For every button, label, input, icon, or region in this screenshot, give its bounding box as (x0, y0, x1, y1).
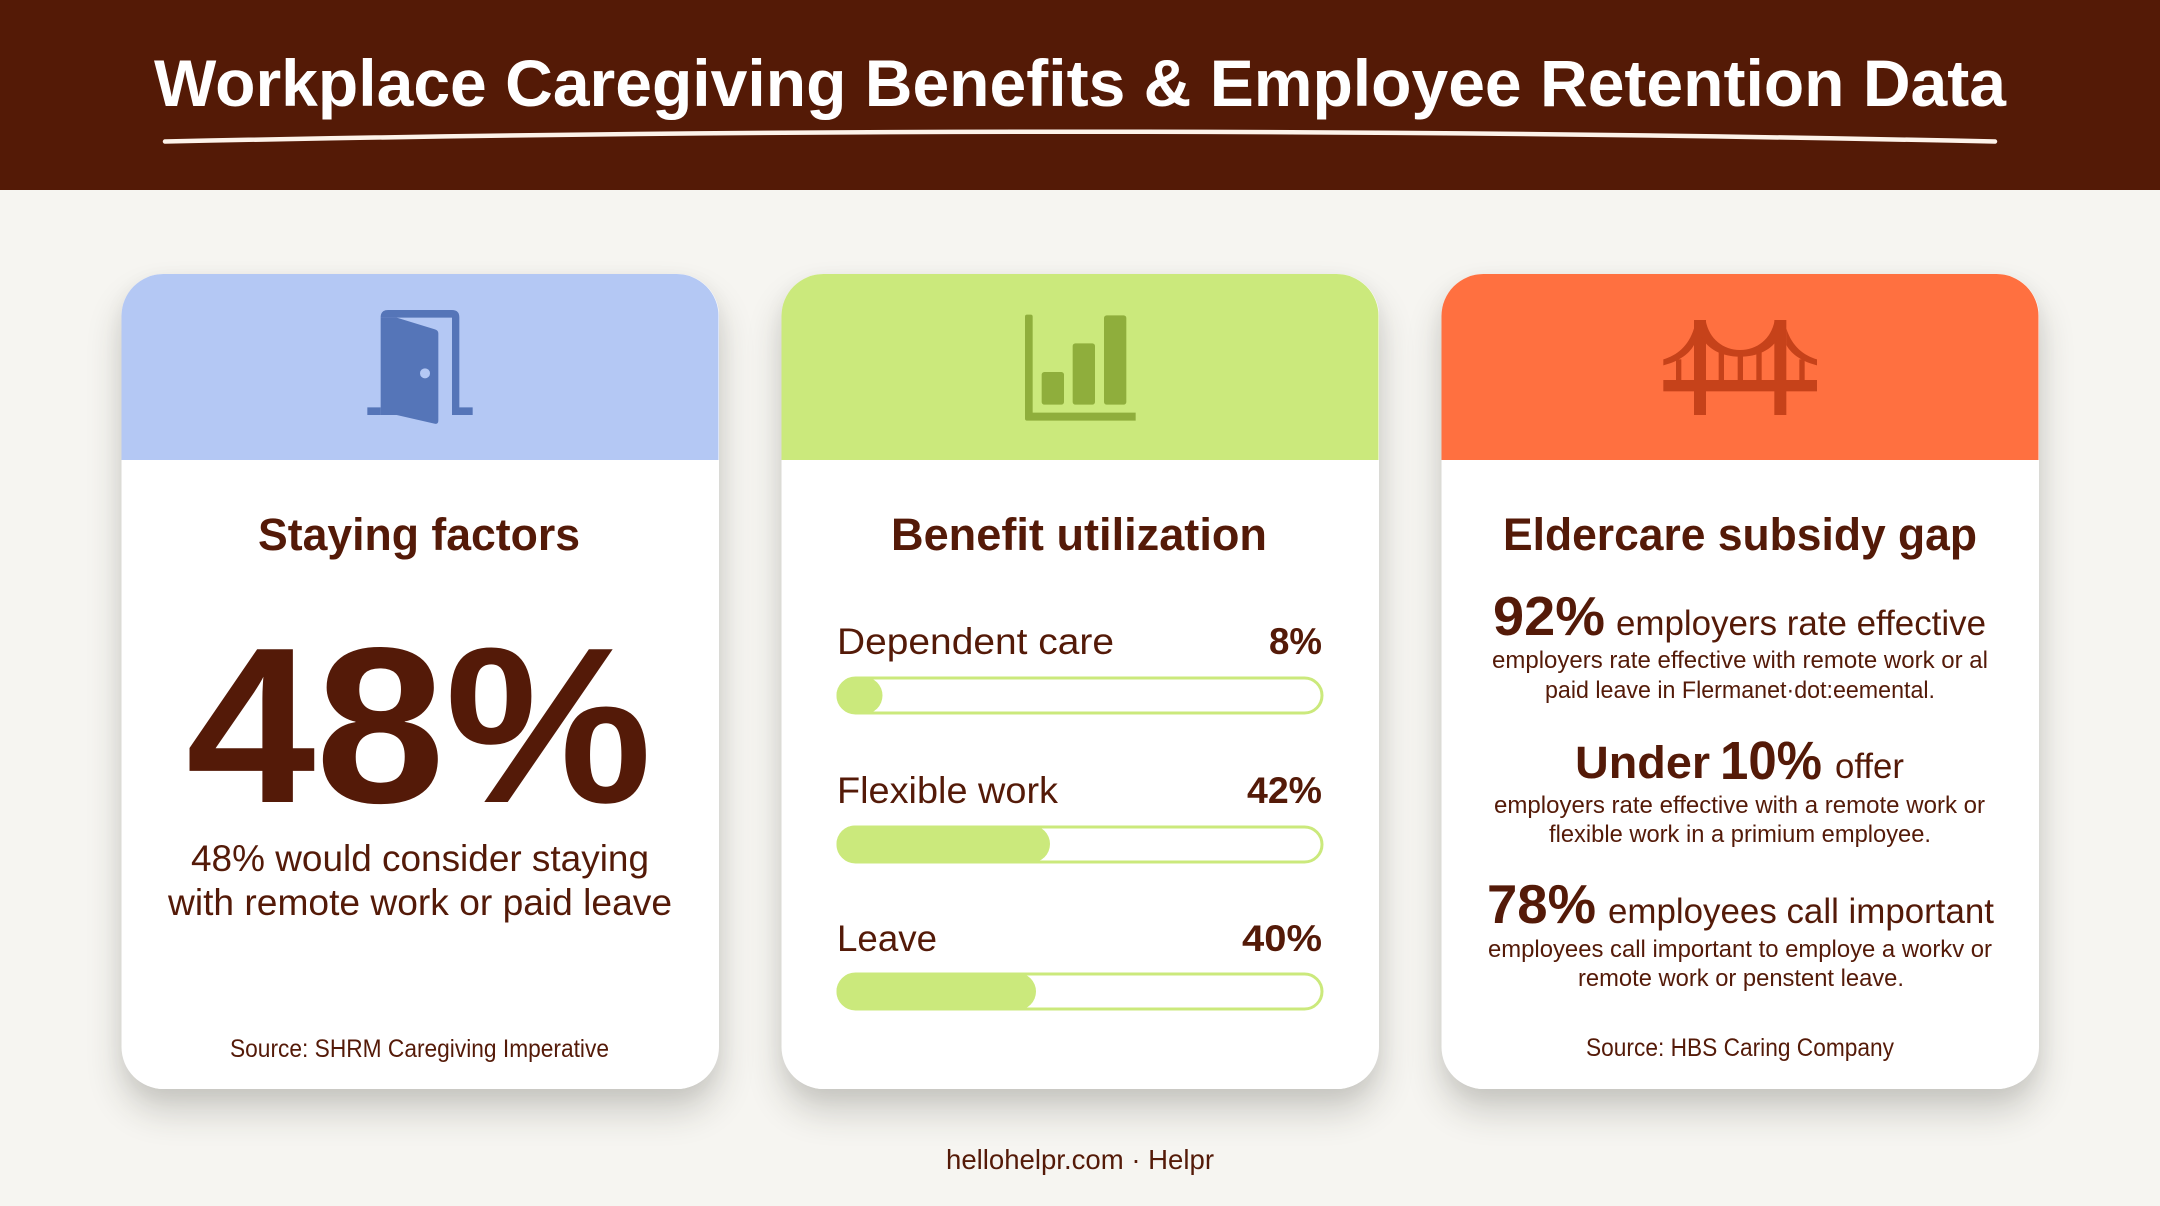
stat block: 92%: employers rate effective with remote work or al (1492, 647, 1988, 674)
stat block: 78% (1487, 873, 1994, 992)
heading: Eldercare subsidy gap (1503, 509, 1977, 560)
panel: staying factors (122, 274, 718, 1089)
stat block: 78%: employees call important to employe a workv or (1488, 936, 1992, 963)
source: Source: HBS Caring Company (1586, 1034, 1894, 1062)
bar row: leave (836, 918, 1322, 1010)
icon: bridge (1663, 320, 1817, 415)
big stat: 48% (186, 602, 652, 850)
stat block: 78%: employees call important (1608, 892, 1994, 931)
icon: bar chart (1025, 315, 1136, 421)
panel: benefit utilization (782, 274, 1378, 1089)
stat block: 92%: 92% (1493, 585, 1605, 647)
title underline (165, 132, 1995, 142)
stat block: under 10%: flexible work in a primium employee. (1549, 821, 1931, 848)
bar row: dependent care (836, 621, 1322, 714)
header band (0, 0, 2160, 190)
bar row: leave: 40% (1242, 918, 1322, 959)
bar row: flexible work: Flexible work (837, 770, 1058, 811)
bar row: leave: Leave (837, 918, 937, 959)
stat block: 78%: 78% (1487, 873, 1596, 935)
stat block: 92%: employers rate effective (1616, 604, 1986, 643)
source: Source: SHRM Caregiving Imperative (230, 1035, 609, 1063)
title: Workplace Caregiving Benefits & Employee Retention Data (154, 46, 2007, 120)
footer: hellohelpr.com · Helpr (946, 1144, 1214, 1175)
bar row: flexible work (836, 770, 1322, 862)
bar row: dependent care: 8% (1269, 621, 1322, 662)
stat block: 78%: remote work or penstent leave. (1578, 965, 1904, 992)
stat block: under 10%: offer (1835, 747, 1904, 786)
stat block: 92% (1492, 585, 1988, 704)
description: with remote work or paid leave (167, 882, 672, 923)
bar row: dependent care: Dependent care (837, 621, 1114, 662)
heading: Staying factors (258, 509, 580, 560)
heading: Benefit utilization (891, 509, 1267, 560)
panel: eldercare subsidy gap (1442, 274, 2038, 1089)
panel header: green (782, 274, 1378, 460)
stat block: under 10% (1494, 731, 1985, 848)
icon: open door (367, 310, 473, 424)
stat block: under 10%: Under (1575, 737, 1710, 788)
bar row: flexible work: 42% (1247, 770, 1322, 811)
stat block: under 10%: 10% (1720, 731, 1822, 791)
panel header: orange (1442, 274, 2038, 460)
panel header: blue (122, 274, 718, 460)
stat block: under 10%: employers rate effective with a remote work or (1494, 792, 1985, 819)
stat block: 92%: paid leave in Flermanet·dot:eemental. (1545, 677, 1935, 704)
description (167, 838, 672, 923)
description: 48% would consider staying (191, 838, 649, 879)
